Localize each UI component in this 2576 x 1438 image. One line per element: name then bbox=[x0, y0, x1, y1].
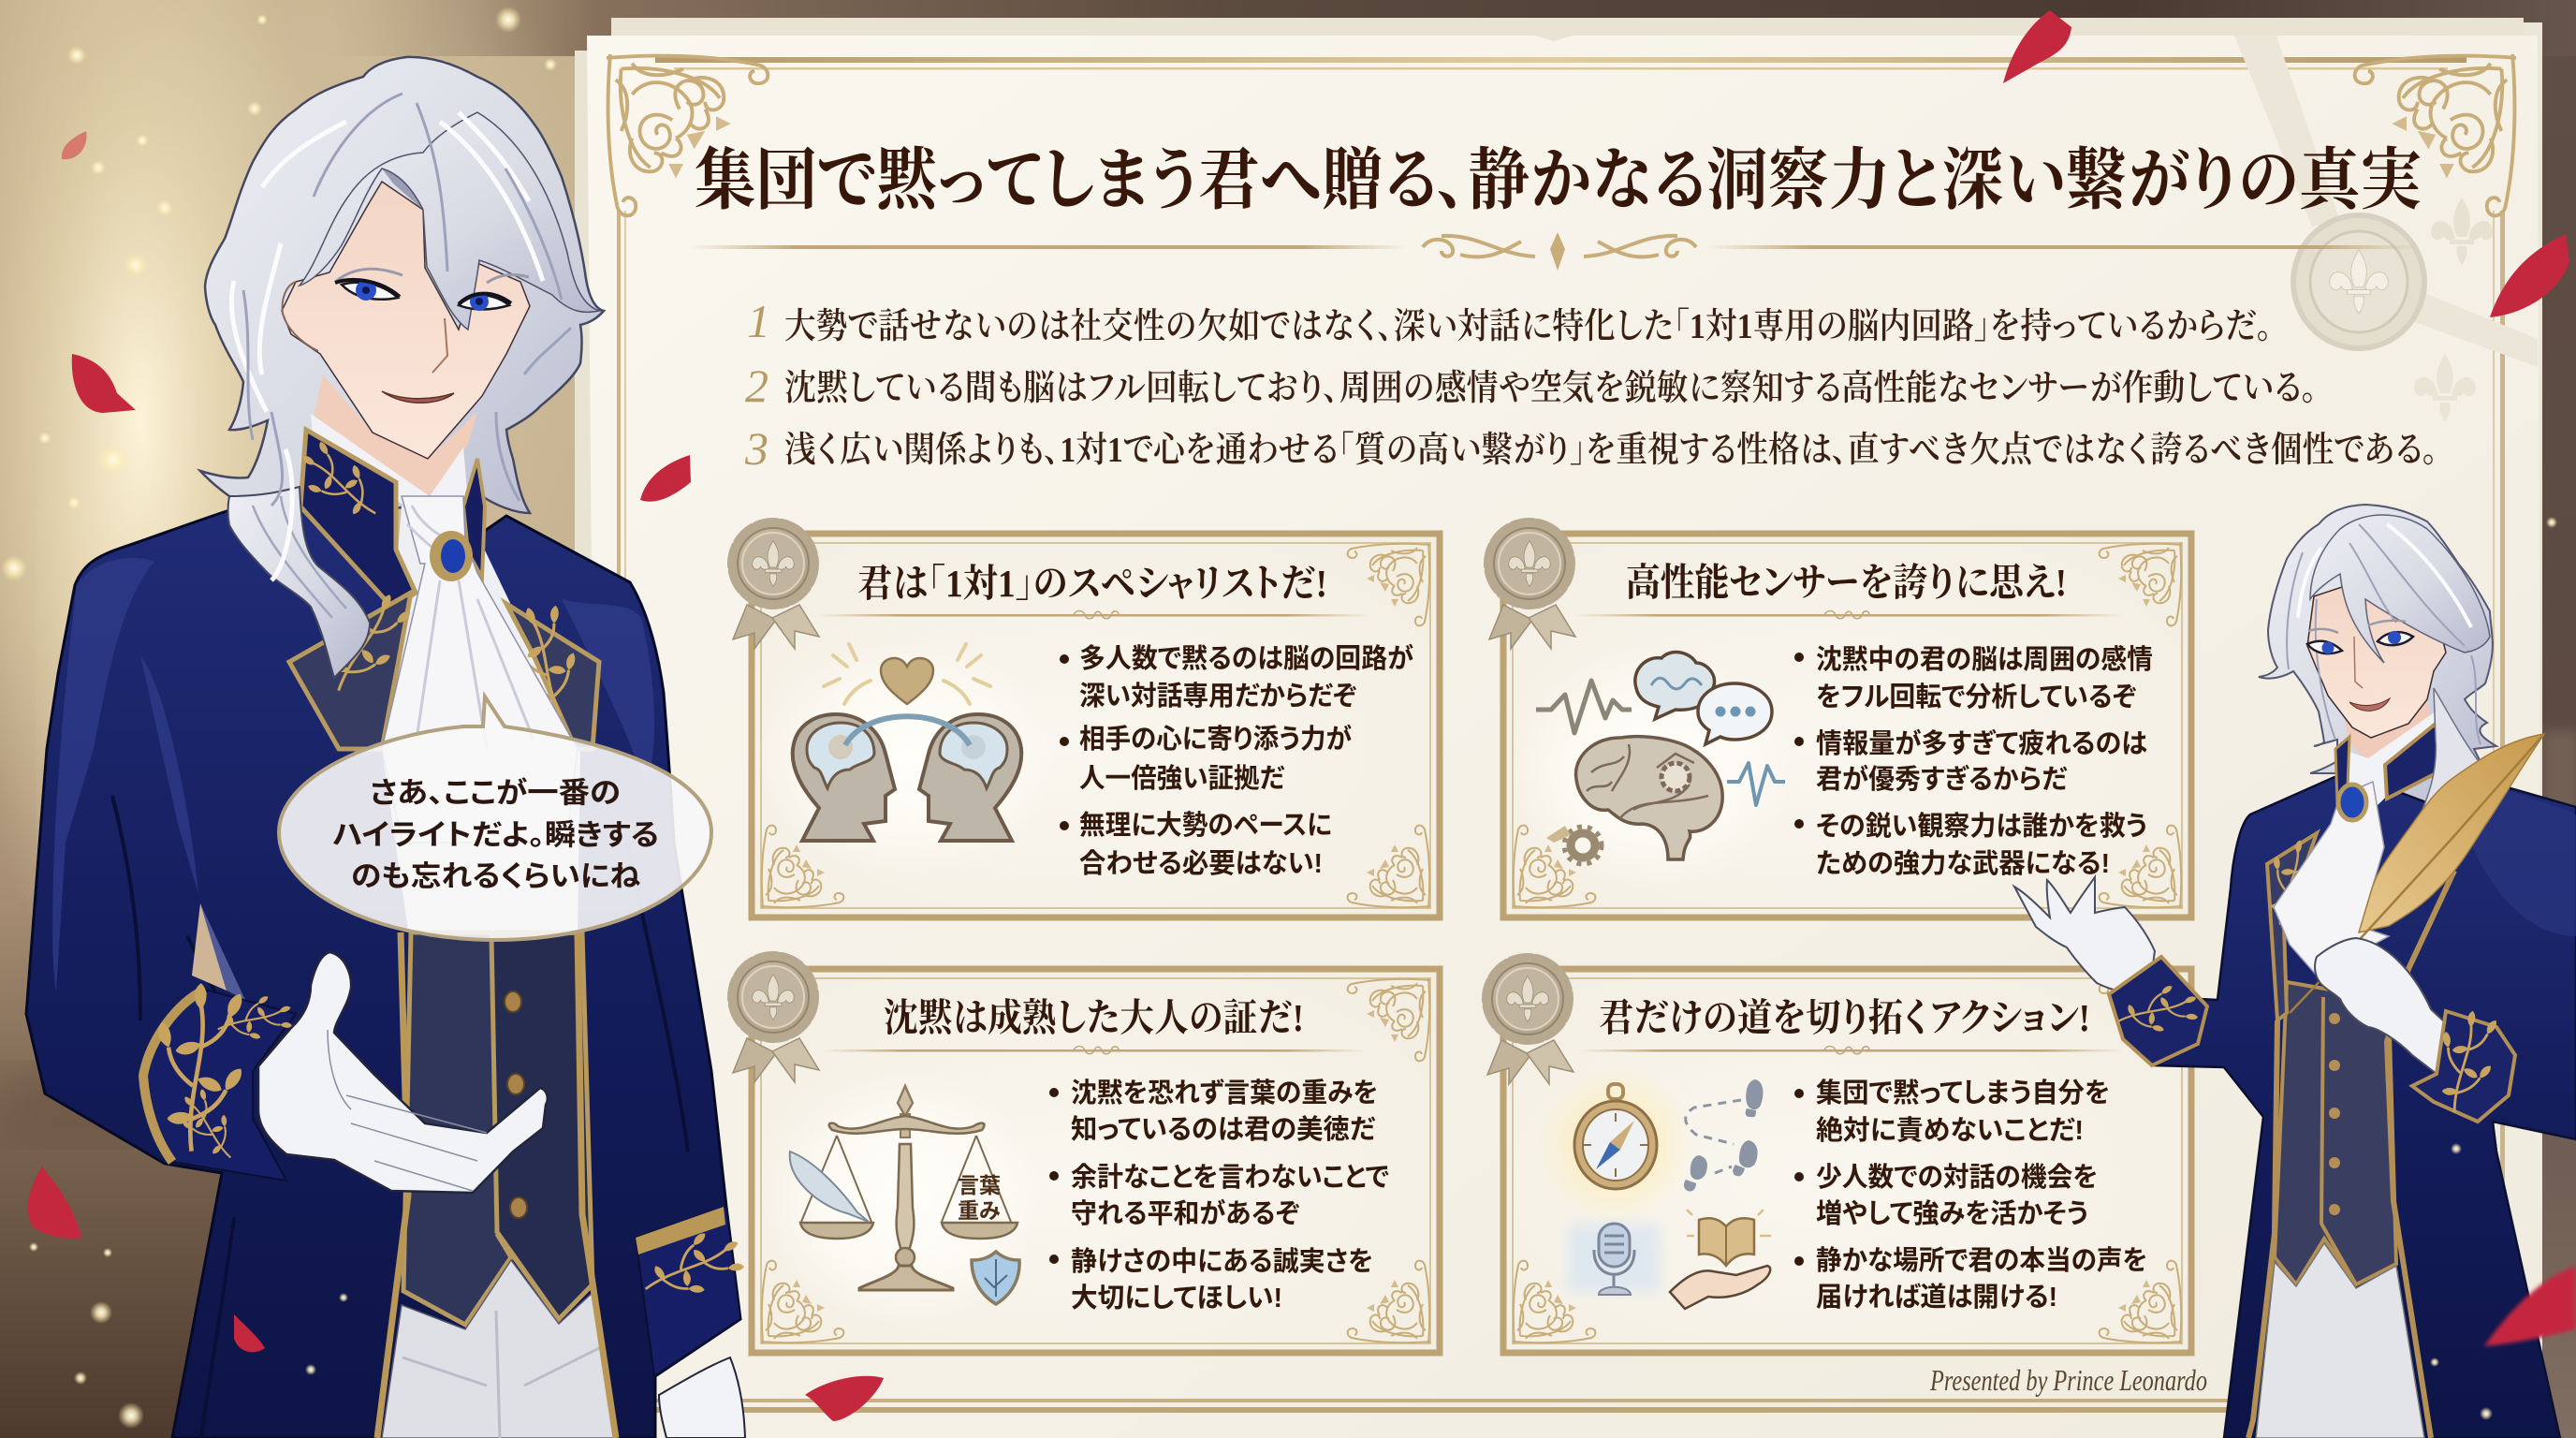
bullet list: ための強力な武器になる! bbox=[1816, 848, 2110, 879]
cuff embroidery bbox=[145, 979, 253, 1155]
shirt front bbox=[382, 506, 580, 936]
bullet list: 静けさの中にある誠実さを bbox=[1071, 1246, 1373, 1277]
hair shading bbox=[231, 94, 571, 580]
ear bbox=[283, 282, 318, 351]
eyes and brows bbox=[335, 269, 529, 311]
vine on collar bbox=[288, 434, 392, 533]
collars bbox=[2385, 724, 2443, 799]
heading: 君は「1対1」のスペシャリストだ! bbox=[857, 562, 1327, 605]
collars bbox=[300, 430, 416, 609]
front hair strands bbox=[300, 112, 599, 330]
bullet list bbox=[1794, 644, 2153, 879]
title divider ornament bbox=[689, 232, 2420, 271]
waistcoat bbox=[403, 932, 591, 1325]
bullet list: 相手の心に寄り添う力が bbox=[1079, 723, 1352, 755]
coat bbox=[26, 496, 740, 1438]
heading: 君だけの道を切り拓くアクション! bbox=[1599, 996, 2090, 1039]
panel: high-performance sensor bbox=[1488, 522, 2191, 917]
open hand glove bbox=[258, 952, 548, 1193]
bullet list: をフル回転で分析しているぞ bbox=[1816, 682, 2136, 712]
bullet list: 余計なことを言わないことで bbox=[1071, 1162, 1389, 1193]
bullet list: 合わせる必要はない! bbox=[1079, 848, 1323, 879]
hair part shadow bbox=[382, 154, 423, 210]
three key points bbox=[744, 295, 2438, 475]
title: 集団で黙ってしまう君へ贈る、静かなる洞察力と深い繋がりの真実 bbox=[695, 143, 2422, 218]
long front hair lock bbox=[2412, 688, 2483, 835]
bullet list bbox=[1060, 642, 1413, 879]
decorative fleurs, ribbon and wax seal at top right of paper bbox=[2234, 36, 2538, 421]
point 2 bbox=[745, 360, 2318, 412]
speech bubble: のも忘れるくらいにね bbox=[351, 859, 640, 893]
parchment sheets bbox=[575, 18, 2542, 1438]
bullet list: 情報量が多すぎて疲れるのは bbox=[1816, 727, 2147, 759]
seal badge bbox=[732, 522, 819, 649]
bullet list: 無理に大勢のペースに bbox=[1079, 810, 1332, 841]
right sleeve cuff bbox=[2412, 1011, 2515, 1122]
buttons bbox=[505, 991, 527, 1218]
icon: balance scale with feather, words and shield: 言葉 bbox=[958, 1173, 1001, 1197]
bullet list: 沈黙を恐れず言葉の重みを bbox=[1071, 1078, 1378, 1108]
trousers bbox=[2256, 1243, 2424, 1438]
trousers bbox=[382, 1260, 614, 1438]
right cuff bbox=[636, 1207, 740, 1376]
skin bbox=[2307, 587, 2446, 738]
long front hair lock over shoulder bbox=[228, 487, 370, 678]
back hair bbox=[200, 57, 604, 524]
icon: balance scale with feather, words and shield: 重み bbox=[958, 1198, 1001, 1223]
face features bbox=[2307, 621, 2413, 711]
lower right glove bbox=[659, 1357, 745, 1438]
point 1: 1 bbox=[747, 295, 770, 347]
pointing hand bbox=[2014, 877, 2155, 994]
front hair bbox=[2310, 515, 2490, 663]
nose and mouth bbox=[382, 318, 454, 403]
lapels and coat edge trim bbox=[2267, 833, 2317, 1020]
icon: compass, footprints, microphone, book and hand bbox=[1536, 1065, 1771, 1309]
hand holding quill bbox=[2315, 938, 2446, 1074]
bullet list: 届ければ道は開ける! bbox=[1816, 1282, 2057, 1313]
character: large prince at left bbox=[26, 57, 752, 1438]
point 2: 2 bbox=[745, 360, 768, 412]
speech bubble bbox=[279, 697, 711, 940]
point 1 bbox=[747, 295, 2273, 347]
speech bubble: さあ、ここが一番の bbox=[370, 777, 621, 809]
icon: two heads connected bbox=[757, 641, 1057, 875]
heading: 沈黙は成熟した大人の証だ! bbox=[884, 996, 1304, 1039]
waistcoat bbox=[2275, 982, 2396, 1284]
back hair bbox=[2259, 505, 2496, 824]
coat bbox=[2109, 777, 2576, 1438]
lapels bbox=[289, 593, 411, 749]
bullet list: 集団で黙ってしまう自分を bbox=[1816, 1078, 2110, 1108]
panel: actions bbox=[1486, 958, 2191, 1353]
bullet list: 人一倍強い証拠だ bbox=[1079, 763, 1284, 794]
heading: 高性能センサーを誇りに思え! bbox=[1626, 561, 2067, 604]
panel: silence is maturity bbox=[732, 956, 1440, 1353]
bullet list: 守れる平和があるぞ bbox=[1071, 1197, 1299, 1229]
icon: brain with signals and speech bubbles bbox=[1512, 646, 1793, 889]
bullet list: 深い対話専用だからだぞ bbox=[1079, 681, 1356, 712]
hair shading strands bbox=[2287, 524, 2481, 744]
brooch bbox=[430, 531, 473, 581]
quill feather bbox=[2359, 734, 2544, 932]
bullet list: 絶対に責めないことだ! bbox=[1816, 1115, 2084, 1146]
point 1: 大勢で話せないのは社交性の欠如ではなく、深い対話に特化した「1対1専用の脳内回路」を持っているからだ。 bbox=[784, 307, 2273, 346]
speech bubble: ハイライトだよ。瞬きする bbox=[332, 818, 659, 852]
point 3 bbox=[744, 422, 2438, 475]
bullet list: 沈黙中の君の脳は周囲の感情 bbox=[1816, 644, 2153, 675]
left cuff bbox=[143, 990, 296, 1181]
point 2: 沈黙している間も脳はフル回転しており、周囲の感情や空気を鋭敏に察知する高性能なセンサーが作動している。 bbox=[784, 369, 2318, 408]
signature: Presented by Prince Leonardo bbox=[1929, 1363, 2207, 1397]
paper border frame bbox=[607, 54, 2516, 1413]
pointing sleeve cuff bbox=[2109, 957, 2207, 1065]
seal badge bbox=[1488, 522, 1575, 649]
face bbox=[282, 182, 530, 459]
icon: balance scale with feather, words and shield bbox=[763, 1072, 1044, 1325]
point 3: 3 bbox=[744, 422, 768, 475]
gap under left arm with coat lining bbox=[192, 903, 245, 1000]
bullet list bbox=[1794, 1078, 2147, 1313]
bullet list: 君が優秀すぎるからだ bbox=[1816, 763, 2067, 795]
cravat bbox=[2274, 782, 2389, 976]
panel: one-on-one specialist bbox=[732, 522, 1440, 917]
bullet list: 知っているのは君の美徳だ bbox=[1071, 1114, 1375, 1145]
neck bbox=[314, 374, 477, 496]
waistcoat placket bbox=[491, 932, 593, 1319]
character: small prince at right with quill bbox=[2014, 505, 2576, 1438]
neck and shirt bbox=[2345, 693, 2434, 763]
coat shading: shoulder highlights and folds bbox=[52, 558, 688, 1438]
coat shading bbox=[2471, 777, 2576, 936]
bullet list: 少人数での対話の機会を bbox=[1816, 1162, 2098, 1193]
seal badge bbox=[732, 956, 819, 1082]
bullet list: 大切にしてほしい! bbox=[1071, 1283, 1282, 1313]
bullet list: その鋭い観察力は誰かを救う bbox=[1816, 811, 2147, 842]
bullet list: 多人数で黙るのは脳の回路が bbox=[1079, 642, 1413, 674]
cravat bbox=[382, 496, 578, 843]
bullet list: 増やして強みを活かそう bbox=[1816, 1198, 2088, 1229]
coat gold front edges bbox=[377, 932, 408, 1438]
seal badge bbox=[1486, 958, 1573, 1084]
bullet list: 静かな場所で君の本当の声を bbox=[1816, 1245, 2147, 1276]
bullet list bbox=[1049, 1078, 1389, 1313]
